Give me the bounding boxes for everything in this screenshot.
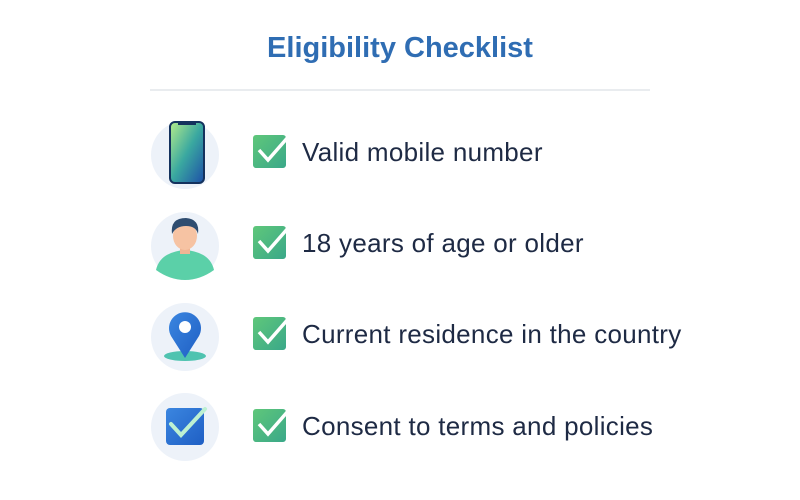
title: Eligibility Checklist — [267, 32, 533, 64]
checkmarks — [253, 135, 289, 442]
text: item 3: Current residence in the country — [302, 319, 682, 349]
text: item 2: 18 years of age or older — [302, 228, 584, 258]
icon: checkbox — [151, 393, 219, 461]
text: item 4: Consent to terms and policies — [302, 411, 653, 441]
icon: person — [151, 212, 219, 280]
icon: phone — [151, 121, 219, 189]
icon: location pin — [151, 303, 219, 371]
text: item 1: Valid mobile number — [302, 137, 543, 167]
